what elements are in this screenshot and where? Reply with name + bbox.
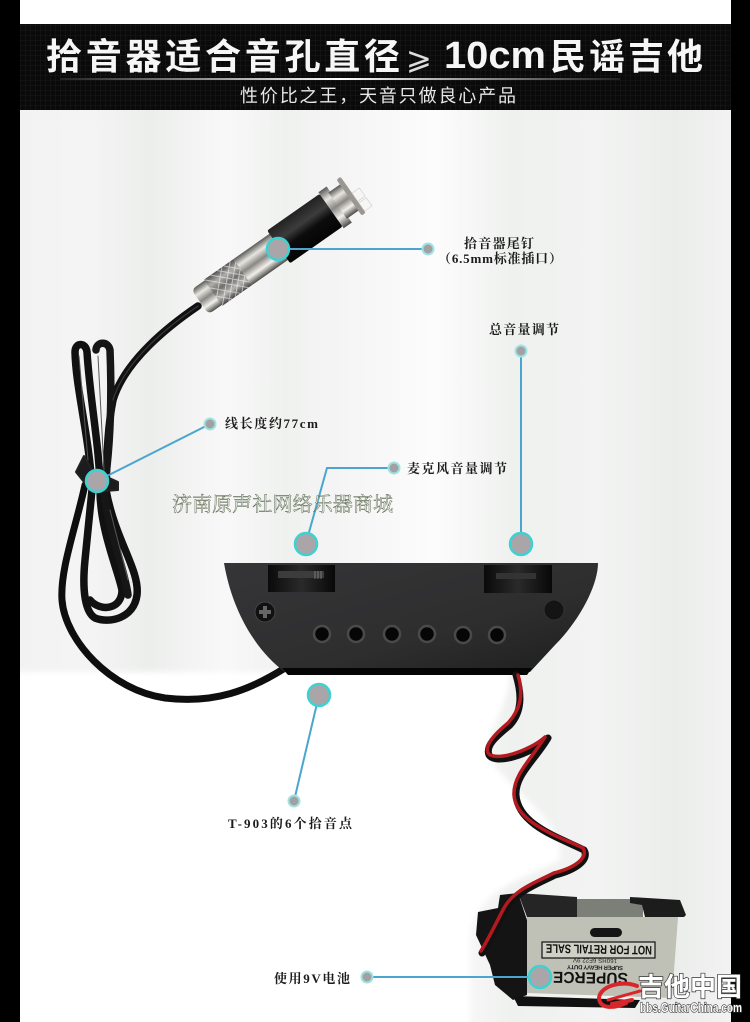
jack plug [187, 172, 373, 320]
label: tail pin [438, 236, 562, 266]
label: cable length: 线长度约77cm [225, 416, 318, 431]
label: tail pin: （6.5mm标准插口） [438, 251, 562, 266]
small markers [204, 244, 526, 982]
label: master volume: 总音量调节 [489, 322, 559, 337]
battery holder [476, 893, 686, 1008]
label: mic volume: 麦克风音量调节 [407, 461, 507, 476]
main heading symbol: ⩾ [406, 41, 432, 77]
label: six pickup points: T-903的6个拾音点 [228, 816, 353, 831]
subheading: 性价比之王，天音只做良心产品 [240, 86, 516, 106]
six pickup sockets [314, 626, 505, 643]
main heading: 拾音器适合音孔直径 [46, 36, 400, 77]
battery spec text: SUPER HEAVY DUTY [567, 963, 623, 970]
battery brand: SUPERCE [552, 968, 628, 986]
retail sale label: NOT FOR RETAIL SALE [546, 941, 652, 957]
right screw [544, 600, 564, 620]
battery [527, 917, 678, 998]
red and black wires [481, 675, 585, 953]
logo chinese name: 吉他中国 [638, 972, 742, 1002]
cable tie [76, 456, 118, 492]
label: tail pin: 拾音器尾钉 [464, 236, 534, 251]
battery black tag [590, 928, 622, 937]
main heading size value: 10cm [444, 35, 546, 77]
main heading end: 民谣吉他 [550, 36, 703, 77]
left volume wheel [268, 565, 335, 592]
cable [62, 306, 285, 699]
large markers [86, 238, 551, 988]
title banner [20, 24, 731, 110]
left screw [255, 602, 275, 622]
battery model text: 160HS 6F22 9V [573, 956, 617, 963]
label: battery: 使用9V电池 [274, 971, 350, 986]
right volume wheel [484, 565, 552, 593]
preamp box [224, 563, 598, 675]
callout lines [97, 249, 540, 977]
site logo watermark [599, 972, 742, 1015]
icon: red guitar logo [599, 984, 640, 1007]
shop watermark: 济南原声社网络乐器商城 [172, 493, 393, 516]
